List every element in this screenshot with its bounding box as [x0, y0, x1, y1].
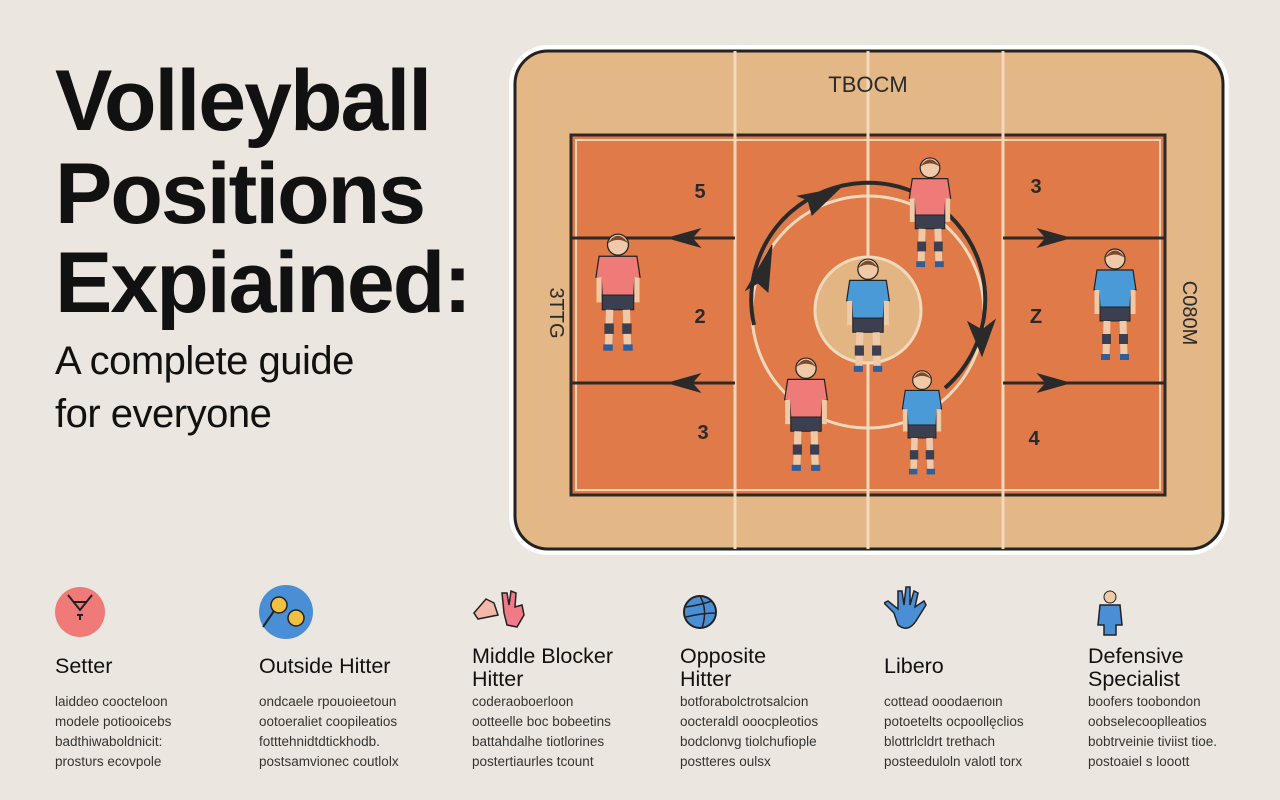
text: cottead ooodaerιoιn: [884, 694, 1003, 709]
title: Expiained:: [55, 235, 470, 331]
text: ondcaele rpouoieetoun: [259, 694, 396, 709]
text: oocteraldl ooocpleotios: [680, 714, 818, 729]
text: Outside Hitter: [259, 654, 390, 678]
text: oobselecooplleatios: [1088, 714, 1207, 729]
subtitle: A complete guide: [55, 339, 354, 383]
text: postsamvionec coutlolx: [259, 754, 399, 769]
title: [55, 53, 470, 331]
text: prostυrs ecovpole: [55, 754, 161, 769]
text: ootoeraliet coopileatios: [259, 714, 397, 729]
column: Middle Blocker Hitter: [472, 590, 613, 769]
column: Defensive Specialist: [1088, 590, 1217, 769]
players: [596, 158, 1136, 474]
subtitle: [55, 339, 354, 436]
text: boofers toobondon: [1088, 694, 1201, 709]
text: battahdalhe tiotlorines: [472, 734, 604, 749]
text: postoaiel s looott: [1088, 754, 1189, 769]
court labels: 2: [694, 306, 706, 328]
text: ootteelle boc bobeetins: [472, 714, 611, 729]
court labels: 3: [697, 422, 709, 444]
court labels: Z: [1030, 306, 1042, 328]
icon: player torso: [1097, 590, 1123, 636]
text: Hitter: [472, 667, 523, 691]
title: Positions: [55, 146, 424, 242]
text: Opposite: [680, 644, 766, 668]
text: Hitter: [680, 667, 731, 691]
court labels: 3TTG: [545, 287, 567, 339]
arrows: side lines: [571, 229, 1165, 392]
icon: hand: [884, 586, 927, 629]
text: modele potiooicebs: [55, 714, 171, 729]
text: bodclonvg tiolchufiople: [680, 734, 817, 749]
text: Libero: [884, 654, 944, 678]
court panel: [512, 48, 1226, 552]
text: potoetelts ocpoollęclios: [884, 714, 1024, 729]
court labels: C080M: [1178, 281, 1200, 345]
text: badthiwaboldnicit:: [55, 734, 162, 749]
text: laiddeo cooctelοon: [55, 694, 168, 709]
text: coderaoboerloon: [472, 694, 573, 709]
court labels: 5: [694, 181, 706, 203]
text: Setter: [55, 654, 112, 678]
text: posteeduloln valotl torx: [884, 754, 1022, 769]
icon: blocking hands: [473, 590, 525, 628]
icon: volleyball: [683, 595, 717, 629]
column: Libero: [884, 586, 1024, 769]
text: fotttehnidtdtickhodb.: [259, 734, 380, 749]
text: botforabolctrotsalcion: [680, 694, 808, 709]
column: Setter: [55, 587, 171, 769]
column: Opposite Hitter: [680, 595, 818, 769]
text: Specialist: [1088, 667, 1180, 691]
text: postteres oulsx: [680, 754, 771, 769]
text: Defensive: [1088, 644, 1184, 668]
subtitle: for everyone: [55, 392, 271, 436]
court labels: TBOCM: [828, 72, 908, 97]
text: blottrlcldrt trethach: [884, 734, 995, 749]
text: bobtrveinie tiviist tioe.: [1088, 734, 1217, 749]
icon: setter: [55, 587, 105, 637]
text: Middle Blocker: [472, 644, 613, 668]
text: postertiaurles tcount: [472, 754, 594, 769]
court labels: 4: [1028, 428, 1040, 450]
column: Outside Hitter: [259, 585, 399, 769]
icon: outside hitter: [259, 585, 313, 639]
court labels: [545, 72, 1200, 450]
arrow: rotation: [746, 183, 995, 388]
title: Volleyball: [55, 53, 430, 149]
court labels: 3: [1030, 176, 1042, 198]
